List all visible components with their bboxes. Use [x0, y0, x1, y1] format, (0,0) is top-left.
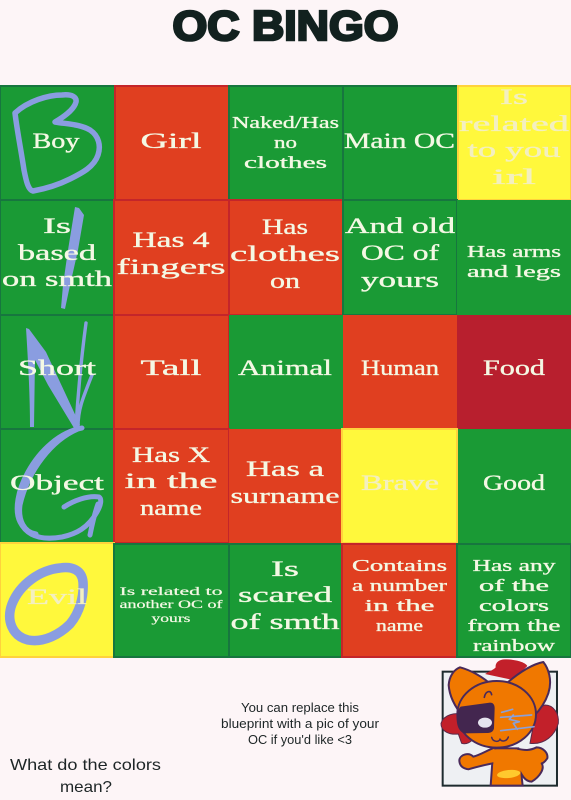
- cell text: Has X in the name: [124, 442, 218, 520]
- scribble: letter G: [17, 428, 101, 538]
- cell text: Is related to another OC of yours: Is related to: [120, 586, 223, 598]
- cell text: Has a surname: surname: [230, 483, 340, 508]
- eye glint: [478, 718, 492, 728]
- cell text: Is based on smth: based: [18, 240, 96, 265]
- cell text: Naked/Has no clothes: [232, 113, 339, 172]
- cell text: Is based on smth: [2, 213, 112, 291]
- cell text: Has clothes on: on: [270, 268, 300, 293]
- cell text: Main OC: Main OC: [344, 128, 455, 153]
- replace blueprint note: [221, 701, 379, 747]
- colors question: What do the colors: [10, 757, 161, 774]
- cell text: Contains a number in the name: a number: [352, 576, 447, 595]
- cell text: Has X in the name: name: [140, 495, 202, 520]
- cell text: Naked/Has no clothes: clothes: [244, 153, 327, 172]
- cell text: And old OC of yours: OC of: [361, 240, 440, 265]
- cell text: Has X in the name: Has X: [132, 442, 210, 467]
- cell text: Is scared of smth: Is: [271, 556, 299, 581]
- row 2 cells: [2, 213, 561, 293]
- colors question: mean?: [60, 779, 112, 796]
- cell text: Contains a number in the name: in the: [364, 596, 434, 615]
- cell text: Has clothes on: clothes: [230, 241, 340, 266]
- cell text: Short: Short: [18, 355, 96, 380]
- replace blueprint note: blueprint with a pic of your: [221, 717, 379, 731]
- cell text: Has arms and legs: Has arms: [467, 242, 561, 261]
- cell text: Is related to you irl: to you: [468, 137, 560, 162]
- cell text: And old OC of yours: [345, 213, 455, 292]
- cell text: Is related to another OC of yours: [120, 586, 223, 625]
- cell text: And old OC of yours: yours: [361, 267, 439, 292]
- scribble: letter N: [26, 323, 92, 428]
- eye patch: [457, 703, 495, 733]
- belly area: [492, 749, 521, 784]
- cell text: Contains a number in the name: [352, 556, 447, 635]
- cell text: Contains a number in the name: Contains: [352, 556, 447, 575]
- cell text: Human: Human: [361, 355, 439, 380]
- cell text: Is scared of smth: of smth: [230, 609, 340, 634]
- scribble: letter I: [61, 207, 84, 309]
- cell text: Has 4 fingers: [116, 227, 226, 279]
- cell text: Is related to you irl: related: [459, 111, 569, 136]
- cell text: Has arms and legs: [467, 242, 561, 281]
- scribble: letter B: [15, 95, 99, 191]
- head: [457, 681, 536, 748]
- cell text: Has 4 fingers: Has 4: [132, 227, 210, 252]
- left ear: [449, 667, 493, 717]
- cell text: Is related to you irl: [459, 84, 569, 189]
- cell text: Has a surname: [230, 456, 340, 508]
- row 5 cells: [27, 556, 560, 655]
- cell text: Has X in the name: in the: [124, 468, 218, 493]
- cell text: Has clothes on: Has: [262, 214, 308, 239]
- row 1 cells: [32, 84, 569, 189]
- hair tuft: [485, 659, 527, 679]
- red side ears: [441, 714, 473, 744]
- cell text: Animal: Animal: [238, 355, 332, 380]
- right arm: [516, 747, 547, 782]
- cell text: Naked/Has no clothes: Naked/Has: [232, 113, 339, 132]
- cell text: Has any of the colors from the rainbow: rainbow: [473, 636, 556, 655]
- body: [491, 748, 523, 786]
- row 3 cells: [18, 355, 545, 380]
- cell text: Is related to another OC of yours: another OC of: [120, 599, 223, 611]
- right ear: [507, 662, 550, 717]
- cell text: Evil: Evil: [27, 584, 87, 609]
- cell text: Is scared of smth: scared: [238, 582, 332, 607]
- cell text: Boy: Boy: [32, 128, 80, 153]
- title: OC BINGO: [172, 2, 398, 49]
- cell text: Tall: Tall: [140, 355, 202, 380]
- cell text: Has any of the colors from the rainbow: of the: [479, 576, 549, 595]
- cell text: Is based on smth: on smth: [2, 266, 112, 291]
- cell text: Has a surname: Has a: [246, 456, 324, 481]
- cell text: Is related to another OC of yours: yours: [152, 613, 191, 625]
- cell text: Object: Object: [10, 470, 104, 495]
- cell text: Girl: Girl: [140, 128, 202, 153]
- cell text: Has 4 fingers: fingers: [116, 254, 226, 279]
- belly mark: [497, 769, 521, 779]
- bingo grid backgrounds: [0, 86, 571, 657]
- cell text: Has arms and legs: and legs: [467, 262, 561, 281]
- cell text: Brave: Brave: [361, 470, 439, 495]
- picture frame: [443, 672, 557, 786]
- colors question: [10, 757, 161, 796]
- OC character picture: [441, 659, 558, 786]
- cell text: Has any of the colors from the rainbow: from the: [468, 616, 560, 635]
- cell text: Has any of the colors from the rainbow: Has any: [472, 556, 556, 575]
- happy eye: [484, 692, 492, 697]
- cell text: Is related to you irl: Is: [500, 84, 528, 109]
- mouth: [492, 737, 508, 741]
- cell text: Contains a number in the name: name: [376, 616, 423, 635]
- row 4 cells: [10, 442, 545, 520]
- cell text: Is scared of smth: [230, 556, 340, 634]
- cell text: Has clothes on: [230, 214, 340, 293]
- cell text: Has any of the colors from the rainbow: colors: [479, 596, 549, 615]
- left arm: [459, 747, 497, 769]
- cell text: Naked/Has no clothes: no: [274, 133, 297, 152]
- cell text: Food: Food: [483, 355, 545, 380]
- cell text: Is related to you irl: irl: [492, 164, 536, 189]
- cell text: Good: Good: [483, 470, 545, 495]
- scribble: letter O: [10, 568, 83, 641]
- cell text: And old OC of yours: And old: [345, 213, 455, 238]
- replace blueprint note: You can replace this: [241, 701, 359, 715]
- blue scribble on face: [501, 709, 534, 731]
- replace blueprint note: OC if you'd like <3: [248, 733, 352, 747]
- cell text: Is based on smth: Is: [43, 213, 71, 238]
- cell text: Has any of the colors from the rainbow: [468, 556, 560, 655]
